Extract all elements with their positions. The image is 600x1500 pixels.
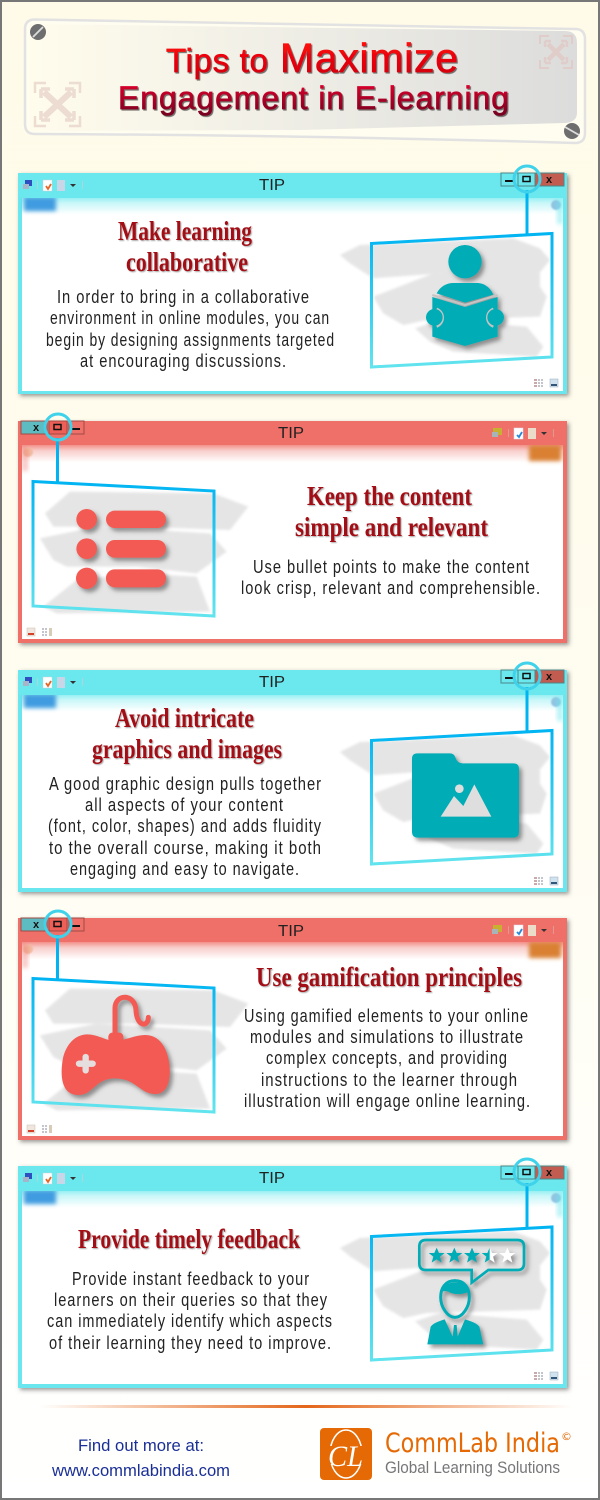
heading: Avoid intricate xyxy=(115,703,254,733)
divider line xyxy=(40,1405,572,1408)
icon: person with star rating xyxy=(419,1240,524,1344)
icon: person reading xyxy=(426,245,504,346)
toolbar icons xyxy=(23,1173,83,1184)
footer text: www.commlabindia.com xyxy=(51,1461,230,1480)
body text: of their learning they need to improve. xyxy=(49,1333,332,1353)
body text xyxy=(46,287,335,371)
heading: simple and relevant xyxy=(295,512,488,542)
toolbar icons xyxy=(23,180,83,191)
window buttons: x xyxy=(33,422,40,434)
heading: Provide timely feedback xyxy=(78,1224,300,1254)
toolbar icons xyxy=(23,677,83,688)
body text xyxy=(48,774,322,879)
status icons xyxy=(27,628,52,636)
heading: collaborative xyxy=(126,247,248,277)
title panel xyxy=(25,20,585,143)
heading: Use gamification principles xyxy=(256,962,522,992)
title: Engagement in E-learning xyxy=(118,80,509,116)
heading: Keep the content xyxy=(307,481,472,511)
body text: can immediately identify which aspects xyxy=(47,1311,333,1331)
body text: learners on their queries so that they xyxy=(54,1290,328,1310)
window title: TIP xyxy=(278,425,304,442)
status icons xyxy=(27,1125,52,1133)
window buttons: x xyxy=(33,919,40,931)
window title: TIP xyxy=(259,674,285,691)
icon: bullet list xyxy=(76,509,166,589)
body text: to the overall course, making it both xyxy=(49,838,322,858)
body text: begin by designing assignments targeted xyxy=(46,330,335,350)
body text: In order to bring in a collaborative xyxy=(57,287,310,307)
body text: Using gamified elements to your online xyxy=(244,1006,529,1026)
window buttons xyxy=(501,173,564,186)
body text: engaging and easy to navigate. xyxy=(70,859,300,879)
panel: tip 4 gamification xyxy=(18,911,567,1140)
connector xyxy=(56,935,59,979)
toolbar icons xyxy=(492,925,554,936)
panel: tip 2 simple content xyxy=(18,414,567,643)
panel: tip 3 graphics xyxy=(18,663,567,892)
body text: (font, color, shapes) and adds fluidity xyxy=(48,816,322,836)
wordmark: Global Learning Solutions xyxy=(385,1458,560,1477)
body text: all aspects of your content xyxy=(85,795,284,815)
wordmark xyxy=(385,1428,572,1477)
title xyxy=(118,35,509,116)
body text: Use bullet points to make the content xyxy=(253,557,530,577)
body text xyxy=(47,1269,333,1353)
image frame xyxy=(372,730,552,864)
window title: TIP xyxy=(259,177,285,194)
toolbar icons xyxy=(492,428,554,439)
status icons xyxy=(534,877,558,885)
body text: Provide instant feedback to your xyxy=(72,1269,310,1289)
body text xyxy=(244,1006,531,1111)
connector xyxy=(526,687,528,731)
image frame xyxy=(372,1227,552,1360)
wordmark: © xyxy=(561,1430,572,1443)
brush background xyxy=(40,492,248,613)
heading: Make learning xyxy=(118,216,252,246)
brush background xyxy=(340,735,550,854)
icon: screw bottom right xyxy=(564,123,580,139)
body text xyxy=(241,557,541,598)
icon: CL mark: CL xyxy=(328,1440,363,1473)
window buttons: x xyxy=(546,174,553,186)
window buttons xyxy=(501,1166,564,1179)
panel: tip 1 collaborative xyxy=(18,166,567,394)
icon: screw top left xyxy=(30,24,46,40)
body text: at encouraging discussions. xyxy=(80,351,287,371)
window buttons xyxy=(21,918,84,931)
icon: faint expand arrows left xyxy=(35,83,80,126)
footer text: Find out more at: xyxy=(78,1436,204,1455)
window title: TIP xyxy=(259,1170,285,1187)
heading xyxy=(295,481,488,542)
body text: instructions to the learner through xyxy=(261,1070,518,1090)
title: Maximize xyxy=(280,35,458,81)
wordmark: CommLab India xyxy=(385,1428,560,1459)
heading xyxy=(118,216,252,277)
brush background xyxy=(340,1231,550,1350)
image frame xyxy=(372,234,552,367)
body text: illustration will engage online learning. xyxy=(244,1091,531,1111)
title: Tips to xyxy=(166,42,268,79)
window buttons: x xyxy=(546,671,553,683)
icon: image folder xyxy=(412,753,519,838)
icon: game controller xyxy=(62,997,170,1095)
body text: modules and simulations to illustrate xyxy=(250,1027,524,1047)
heading: graphics and images xyxy=(92,734,282,764)
body text: environment in online modules, you can xyxy=(50,308,330,328)
logo xyxy=(320,1428,572,1480)
connector xyxy=(526,1183,528,1228)
connector xyxy=(56,438,59,483)
footer text xyxy=(51,1436,230,1480)
heading xyxy=(92,703,282,764)
status icons xyxy=(534,1372,558,1380)
panel: tip 5 feedback xyxy=(18,1159,567,1388)
brush background xyxy=(40,989,248,1110)
window title: TIP xyxy=(278,923,304,940)
window buttons xyxy=(501,670,564,683)
window buttons xyxy=(21,421,84,434)
connector xyxy=(526,190,528,234)
body text: complex concepts, and providing xyxy=(266,1048,508,1068)
brush background xyxy=(340,238,550,357)
image frame xyxy=(33,978,214,1112)
window buttons: x xyxy=(546,1167,553,1179)
status icons xyxy=(534,379,558,387)
body text: A good graphic design pulls together xyxy=(49,774,322,794)
icon: faint expand arrows right xyxy=(540,36,572,68)
icon: CL mark xyxy=(320,1428,372,1480)
image frame xyxy=(33,482,214,616)
